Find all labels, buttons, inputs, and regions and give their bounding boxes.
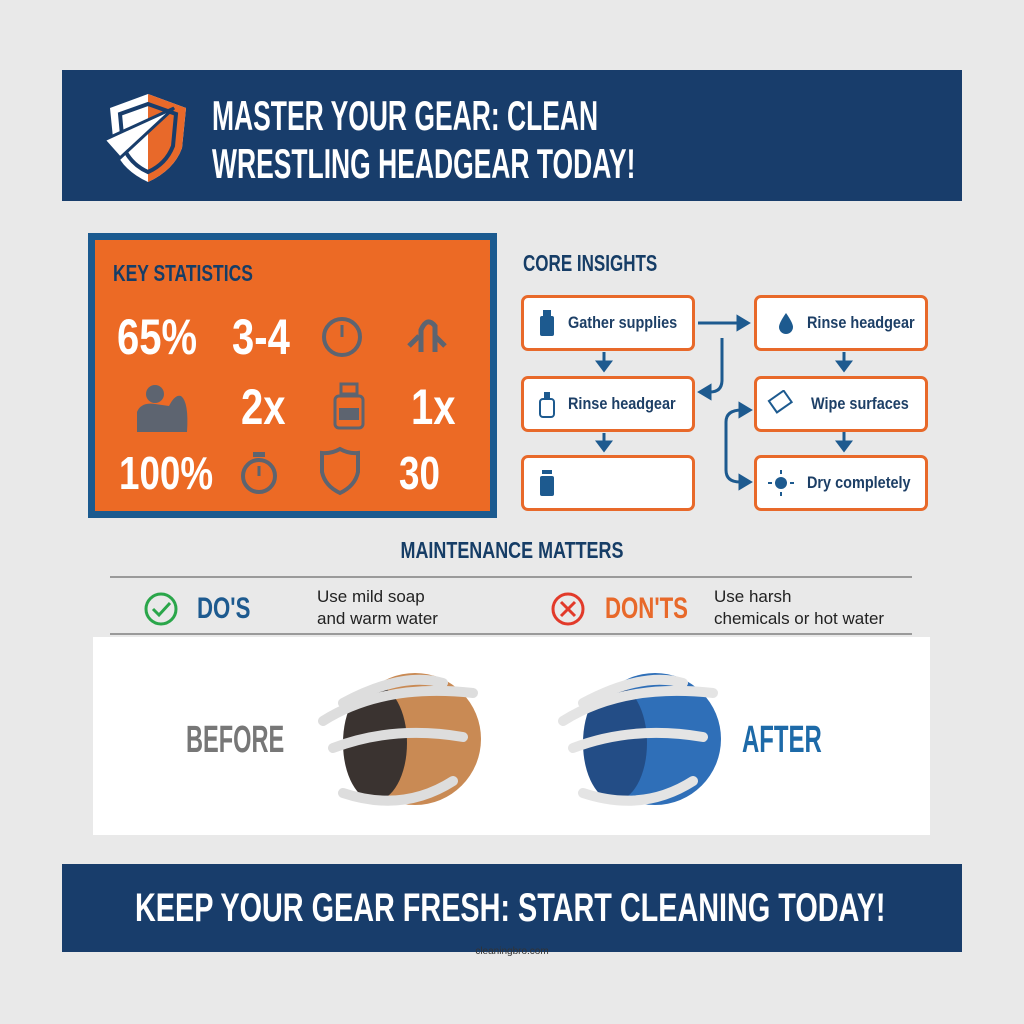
icon: stopwatch xyxy=(241,452,277,494)
flow: rinse headgear left xyxy=(521,376,695,432)
flow: rinse headgear left: Rinse headgear xyxy=(568,394,676,413)
header banner xyxy=(62,70,962,201)
image: dirty headgear xyxy=(318,673,481,806)
icon: person xyxy=(137,385,188,432)
flow: rinse headgear right: Rinse headgear xyxy=(807,313,915,332)
do's row: Use mild soap xyxy=(317,587,425,606)
arrows: flow connectors xyxy=(595,314,753,491)
icon: shield xyxy=(320,446,360,496)
flow: dry completely xyxy=(754,455,928,511)
title: MASTER YOUR GEAR: CLEAN xyxy=(212,92,598,139)
heading: core insights: CORE INSIGHTS xyxy=(523,250,657,276)
panel: key statistics: 3-4 xyxy=(232,309,290,365)
flow: dry completely: Dry completely xyxy=(807,473,911,492)
panel: key statistics: 65% xyxy=(117,309,197,365)
title: WRESTLING HEADGEAR TODAY! xyxy=(212,140,635,187)
arrows: right column xyxy=(835,352,853,452)
panel: key statistics: 1x xyxy=(411,379,456,435)
flow: rinse headgear right xyxy=(754,295,928,351)
watermark: cleaningbro.com xyxy=(475,946,549,957)
do's row xyxy=(144,587,438,628)
footer banner xyxy=(62,864,962,952)
label: before: BEFORE xyxy=(186,719,284,761)
icon: shield logo xyxy=(106,94,186,182)
footer text: KEEP YOUR GEAR FRESH: START CLEANING TODAY! xyxy=(135,886,885,930)
panel: key statistics: 2x xyxy=(241,379,286,435)
flow: wipe surfaces: Wipe surfaces xyxy=(811,394,909,413)
heading: maintenance matters: MAINTENANCE MATTERS xyxy=(401,537,623,563)
flow: wipe surfaces xyxy=(754,376,928,432)
image: clean headgear xyxy=(558,673,721,806)
don'ts row: chemicals or hot water xyxy=(714,609,884,628)
panel: key statistics: 30 xyxy=(399,447,440,499)
don'ts row: DON'TS xyxy=(605,592,688,625)
heading: key statistics: KEY STATISTICS xyxy=(113,260,253,286)
flow: gather supplies xyxy=(521,295,695,351)
panel: before and after xyxy=(93,637,930,835)
don'ts row: Use harsh xyxy=(714,587,791,606)
icon: bottle xyxy=(334,382,364,430)
flow: gather supplies: Gather supplies xyxy=(568,313,677,332)
do's row: DO'S xyxy=(197,592,250,625)
icon: clock xyxy=(322,317,362,357)
panel: key statistics: 100% xyxy=(119,447,213,499)
title xyxy=(212,92,635,187)
panel: key statistics xyxy=(88,233,497,518)
icon: figure xyxy=(407,319,447,352)
don'ts row xyxy=(552,587,884,628)
do's row: and warm water xyxy=(317,609,438,628)
flow: blank step xyxy=(521,455,695,511)
label: after: AFTER xyxy=(742,719,822,761)
